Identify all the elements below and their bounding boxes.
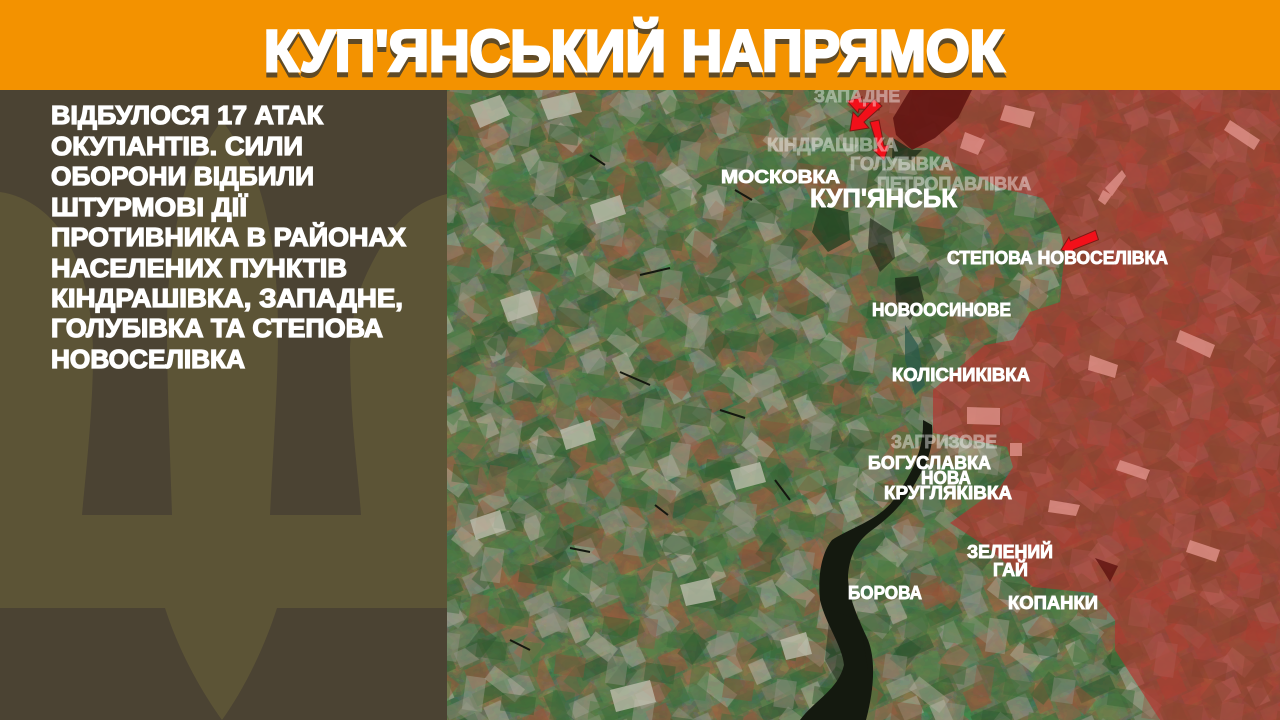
ravines [510,155,790,650]
arrow: towards Kindrashivka [850,99,882,131]
body text: ШТУРМОВІ ДІЇ [51,192,248,222]
map [447,86,1280,720]
label: faded settlements: ГОЛУБІВКА [850,154,953,174]
label: active settlements: ГАЙ [993,559,1028,580]
body text: ГОЛУБІВКА ТА СТЕПОВА [51,313,383,343]
body text: ОКУПАНТІВ. СИЛИ [51,131,303,161]
body text: НОВОСЕЛІВКА [51,344,245,374]
title: КУП'ЯНСЬКИЙ НАПРЯМОК [264,24,1005,89]
occupied territory overlay [847,90,1280,720]
arrow: towards Stepova Novoselivka [1061,230,1098,254]
forest and river details [800,205,932,720]
left panel background [0,90,447,720]
label: faded settlements: КІНДРАШІВКА [767,135,898,155]
icon: trident watermark [0,120,447,720]
body text: ОБОРОНИ ВІДБИЛИ [51,161,314,191]
label: active settlements: БОГУСЛАВКА [868,453,991,473]
arrow: towards Holubivka [870,120,889,160]
body text [51,100,407,374]
label: active settlements: НОВА [921,468,971,488]
label: faded settlements: ПЕТРОПАВЛІВКА [877,174,1031,194]
arrow: towards Zapadne [847,97,880,113]
label: active settlements: КРУГЛЯКІВКА [884,483,1012,503]
body text: ВІДБУЛОСЯ 17 АТАК [51,100,323,130]
map labels [721,86,1168,613]
pale fields in occupied area [960,105,1260,562]
label: faded settlements: ЗАПАДНЕ [814,86,900,106]
header band [0,0,1280,90]
label: active settlements: МОСКОВКА [721,167,840,187]
label: active settlements: НОВООСИНОВЕ [872,300,1011,320]
body text: ПРОТИВНИКА В РАЙОНАХ [51,222,407,252]
arrows [847,97,1098,254]
label: active settlements: БОРОВА [848,583,922,603]
label: faded settlements [767,86,1031,452]
pale fields on left map [470,92,812,712]
title: КУП'ЯНСЬКИЙ НАПРЯМОК [264,19,1005,84]
label: active settlements: СТЕПОВА НОВОСЕЛІВКА [947,248,1168,268]
label: active settlements: КОПАНКИ [1008,593,1098,613]
label: faded settlements: ЗАГРИЗОВЕ [891,432,997,452]
label: active settlements: ЗЕЛЕНИЙ [967,541,1053,562]
label: active settlements [721,167,1168,613]
body text: КІНДРАШІВКА, ЗАПАДНЕ, [51,283,403,313]
body text: НАСЕЛЕНИХ ПУНКТІВ [51,253,347,283]
dark forest in occupied area [893,90,972,150]
label: active settlements: КОЛІСНИКІВКА [892,365,1030,385]
label: active settlements: КУП'ЯНСЬК [810,183,957,213]
